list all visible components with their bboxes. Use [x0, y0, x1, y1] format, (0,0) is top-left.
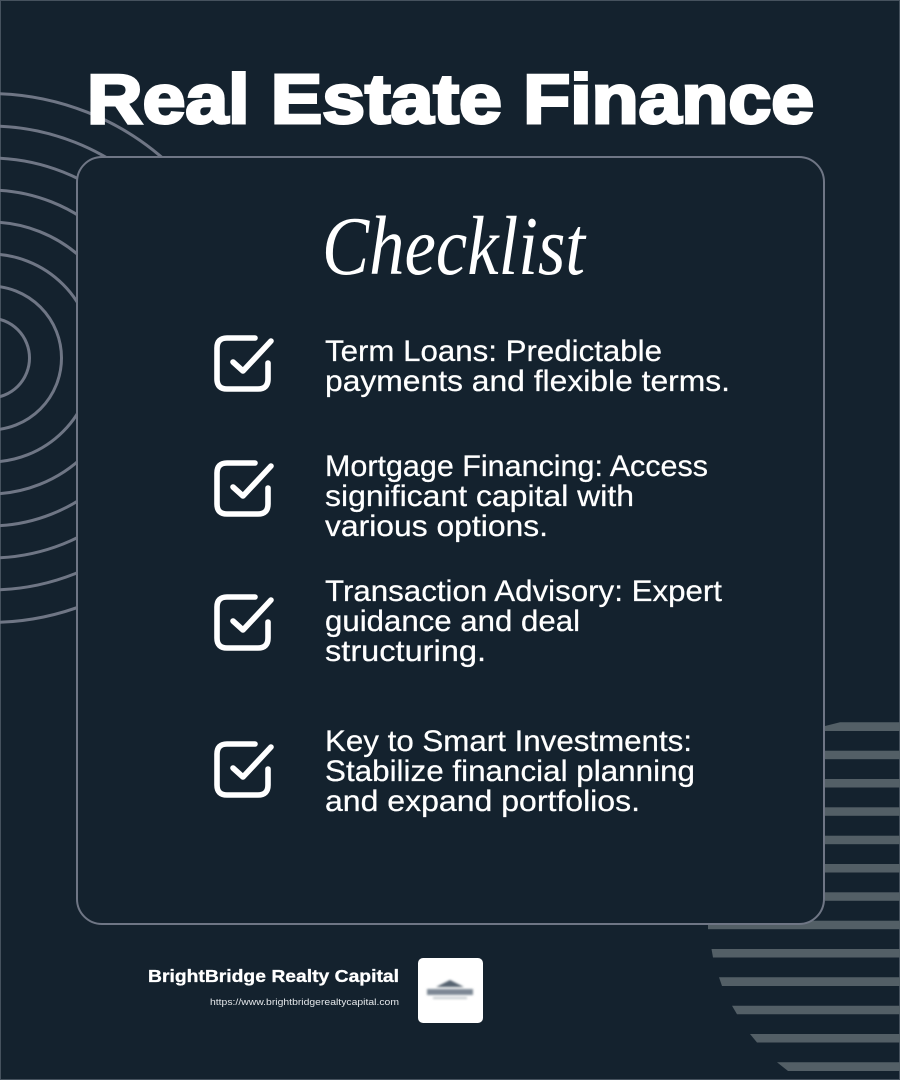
text: mortgage financing: various options. [325, 510, 548, 543]
icon: checkbox 1 [217, 338, 271, 389]
text: smart investments: Key to Smart Investments: [325, 725, 692, 758]
checklist item 4 [217, 725, 695, 818]
icon: checkbox 3 [217, 597, 271, 648]
checklist item 2 [217, 450, 708, 543]
footer: company name: BrightBridge Realty Capital [148, 966, 399, 986]
text: term loans [325, 335, 730, 398]
title: Real Estate Finance [87, 60, 814, 138]
decorative concentric rings [0, 92, 162, 624]
text: transaction advisory: Transaction Advisory: Expert [325, 575, 723, 608]
text: smart investments [325, 725, 695, 818]
text: smart investments: and expand portfolios. [325, 785, 640, 818]
text: mortgage financing: significant capital with [325, 480, 634, 513]
logo [418, 958, 483, 1023]
heading: Checklist: Checklist [322, 200, 587, 293]
icon: checkbox 4 [217, 744, 271, 795]
footer: website url: https://www.brightbridgerealtycapital.com [210, 997, 399, 1008]
decorative stripes [708, 722, 900, 1071]
panel: checklist card [77, 157, 824, 924]
text: smart investments: Stabilize financial planning [325, 755, 695, 788]
checklist item 1 [217, 335, 730, 398]
icon: checkbox 2 [217, 463, 271, 514]
checklist item 3 [217, 575, 723, 668]
text: transaction advisory [325, 575, 723, 668]
text: term loans: payments and flexible terms. [325, 365, 730, 398]
text: mortgage financing: Mortgage Financing: Access [325, 450, 708, 483]
text: mortgage financing [325, 450, 708, 543]
text: transaction advisory: structuring. [325, 635, 486, 668]
text: term loans: Term Loans: Predictable [325, 335, 662, 368]
text: transaction advisory: guidance and deal [325, 605, 580, 638]
